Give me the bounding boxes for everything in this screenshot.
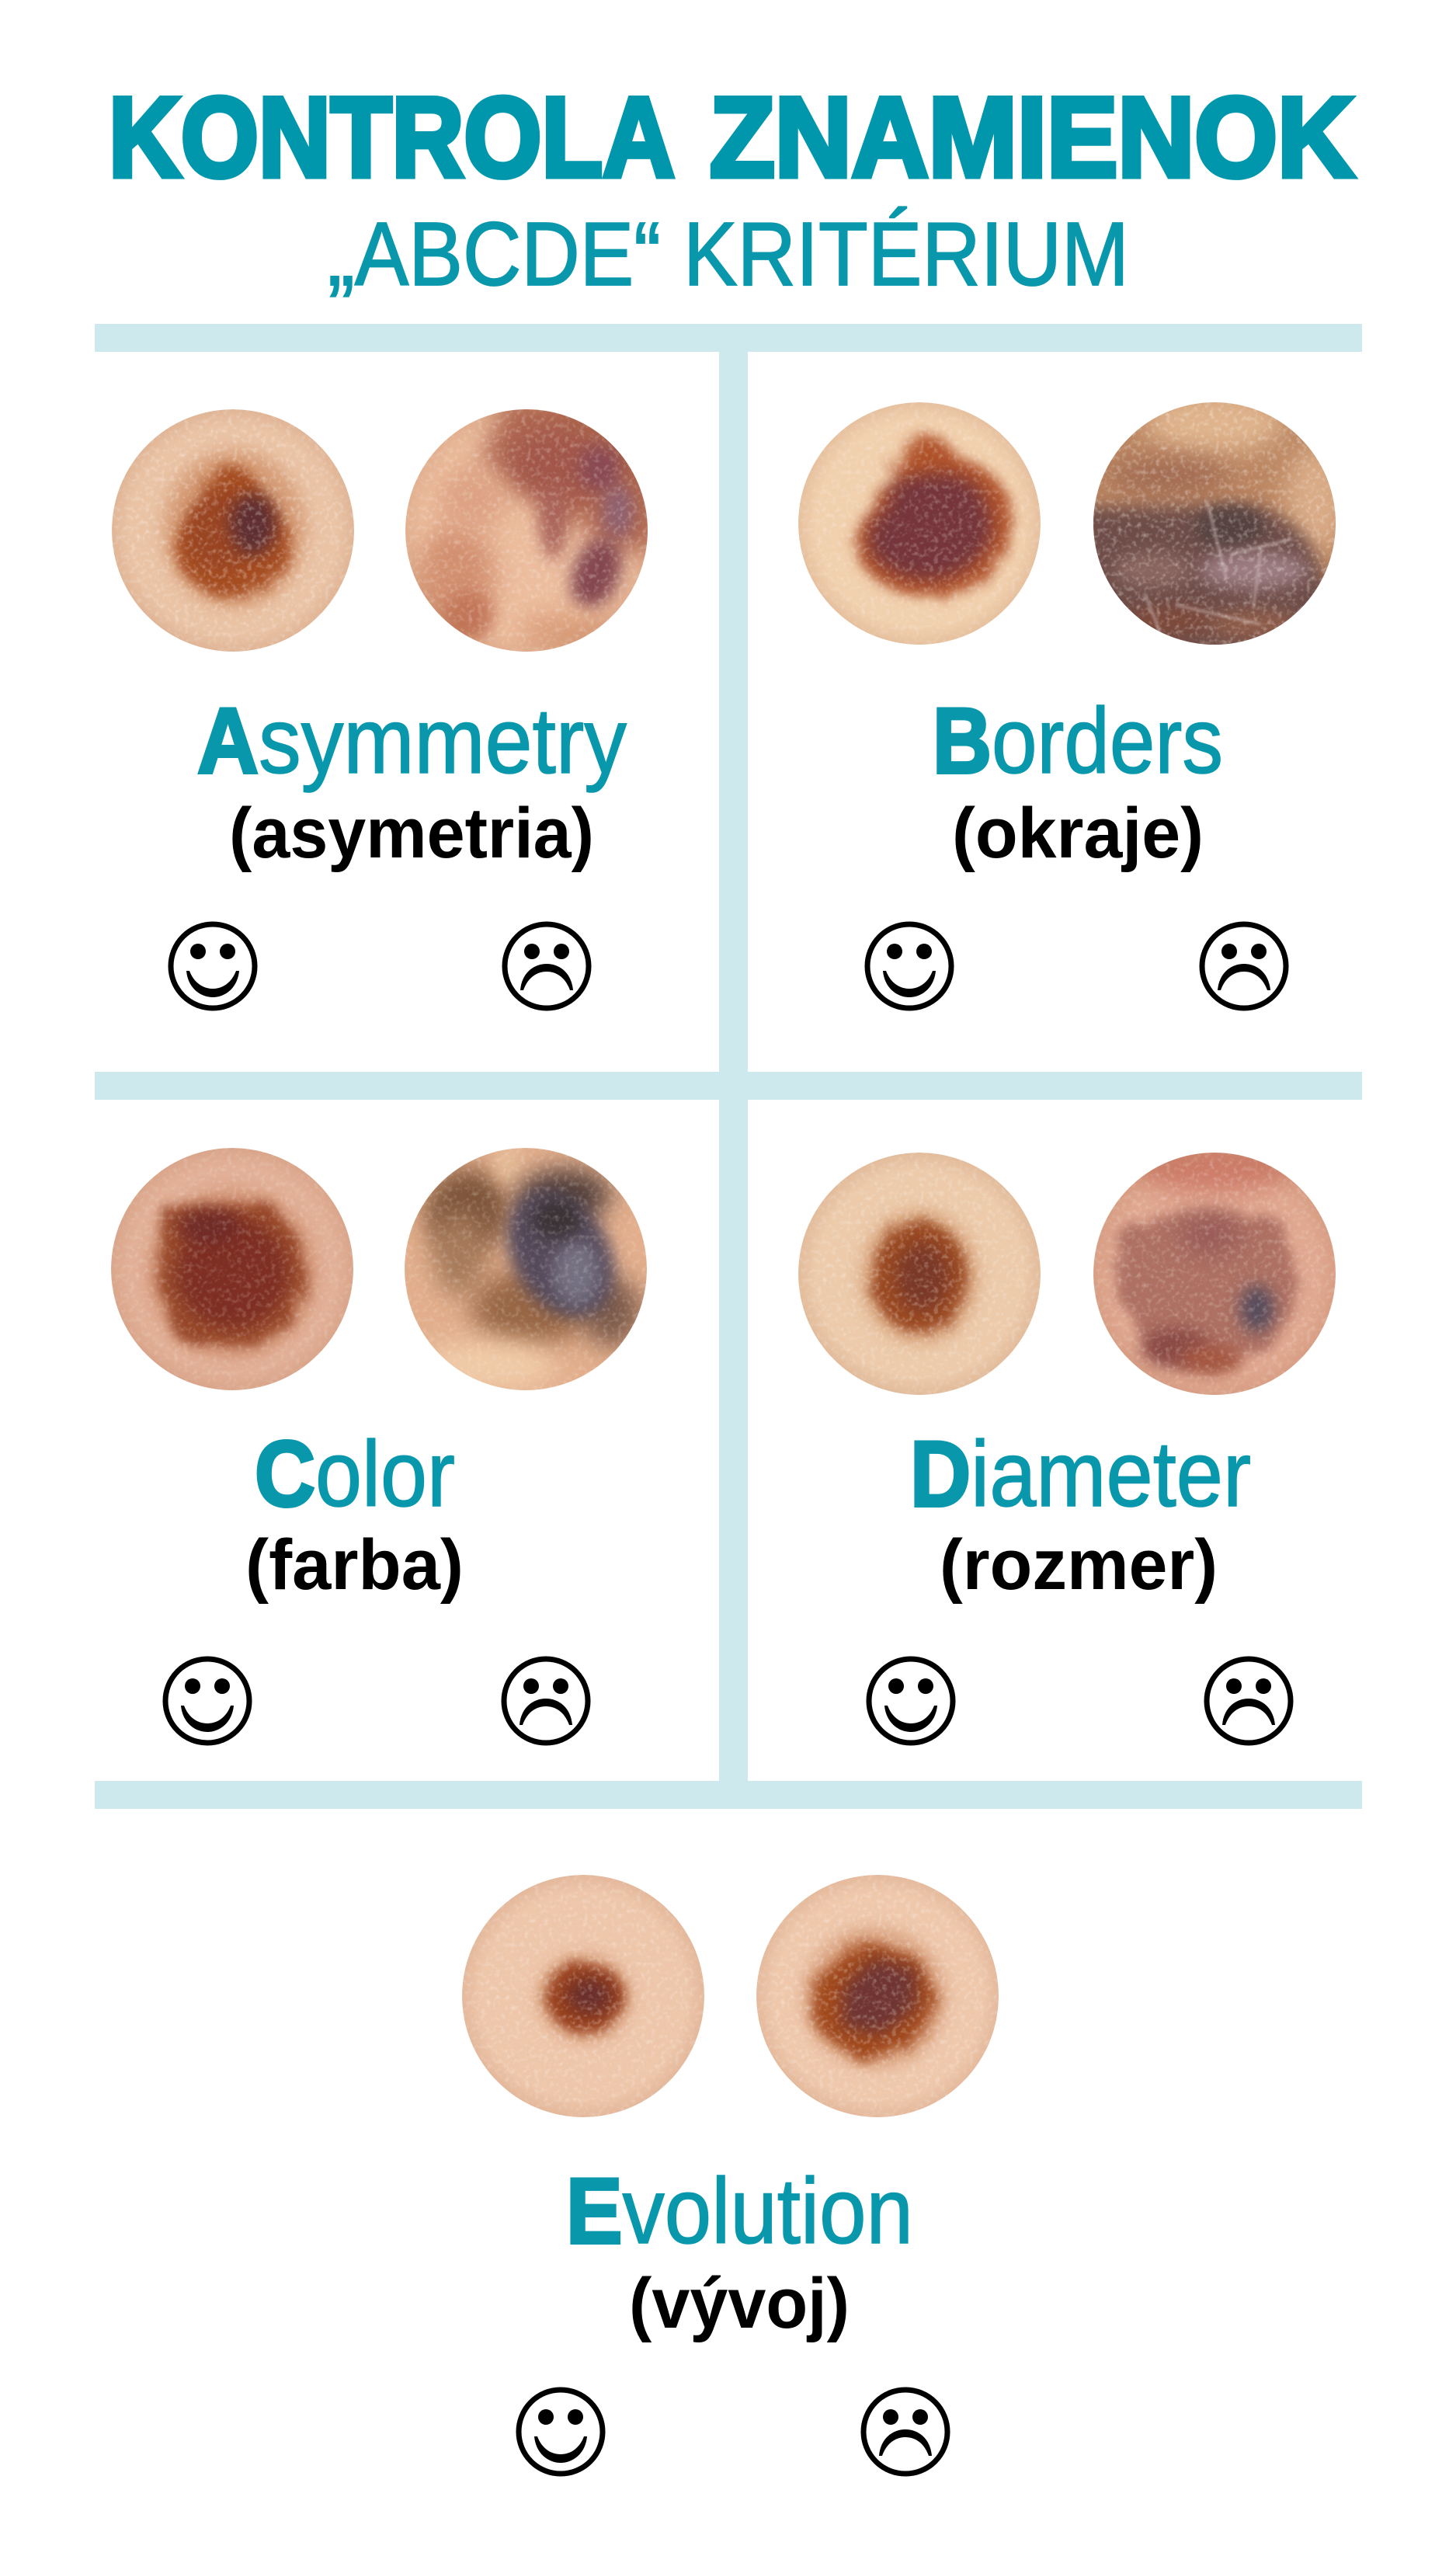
title: KONTROLA xyxy=(109,74,675,200)
grid dividers xyxy=(95,324,1362,1809)
icon: happy face xyxy=(867,924,951,1008)
icon: happy face xyxy=(171,924,255,1008)
heading: Color: Color xyxy=(255,1422,455,1526)
icon: sad face xyxy=(505,924,589,1008)
icon: sad face xyxy=(1207,1659,1291,1743)
heading: Asymmetry: Asymmetry xyxy=(197,689,627,793)
title: ZNAMIENOK xyxy=(710,74,1354,200)
photo: mole after xyxy=(756,1875,999,2117)
panel: asymmetry xyxy=(112,398,659,1008)
photo: uniform color mole xyxy=(111,1148,353,1390)
photo: small diameter mole xyxy=(798,1153,1041,1395)
panel: diameter xyxy=(798,1146,1336,1743)
translation: okraje: (okraje) xyxy=(952,794,1204,873)
icon: happy face xyxy=(165,1659,249,1743)
photo: regular border mole xyxy=(798,402,1041,645)
icon: sad face xyxy=(504,1659,588,1743)
photo: multi-color mole xyxy=(405,1144,647,1391)
photo: mole before xyxy=(462,1875,704,2117)
panel: evolution xyxy=(462,1875,999,2474)
heading: Borders: Borders xyxy=(933,689,1223,793)
translation: farba: (farba) xyxy=(245,1525,464,1605)
photo: symmetric mole xyxy=(112,409,354,652)
panel: borders xyxy=(798,391,1347,1008)
icon: sad face xyxy=(864,2390,947,2474)
translation: asymetria: (asymetria) xyxy=(229,794,594,873)
heading: Evolution: Evolution xyxy=(566,2159,913,2263)
subtitle: „ABCDE“ KRITÉRIUM xyxy=(328,203,1129,304)
icon: happy face xyxy=(519,2390,603,2474)
icon: sad face xyxy=(1202,924,1286,1008)
photo: asymmetric mole xyxy=(405,398,659,652)
icon: happy face xyxy=(869,1659,953,1743)
translation: rozmer: (rozmer) xyxy=(940,1525,1218,1605)
photo: large diameter mole xyxy=(1093,1146,1336,1395)
translation: vývoj: (vývoj) xyxy=(629,2264,850,2343)
title xyxy=(109,74,1354,200)
photo: irregular border mole xyxy=(1093,402,1336,645)
heading: Diameter: Diameter xyxy=(910,1422,1251,1526)
panel: color xyxy=(111,1144,647,1743)
